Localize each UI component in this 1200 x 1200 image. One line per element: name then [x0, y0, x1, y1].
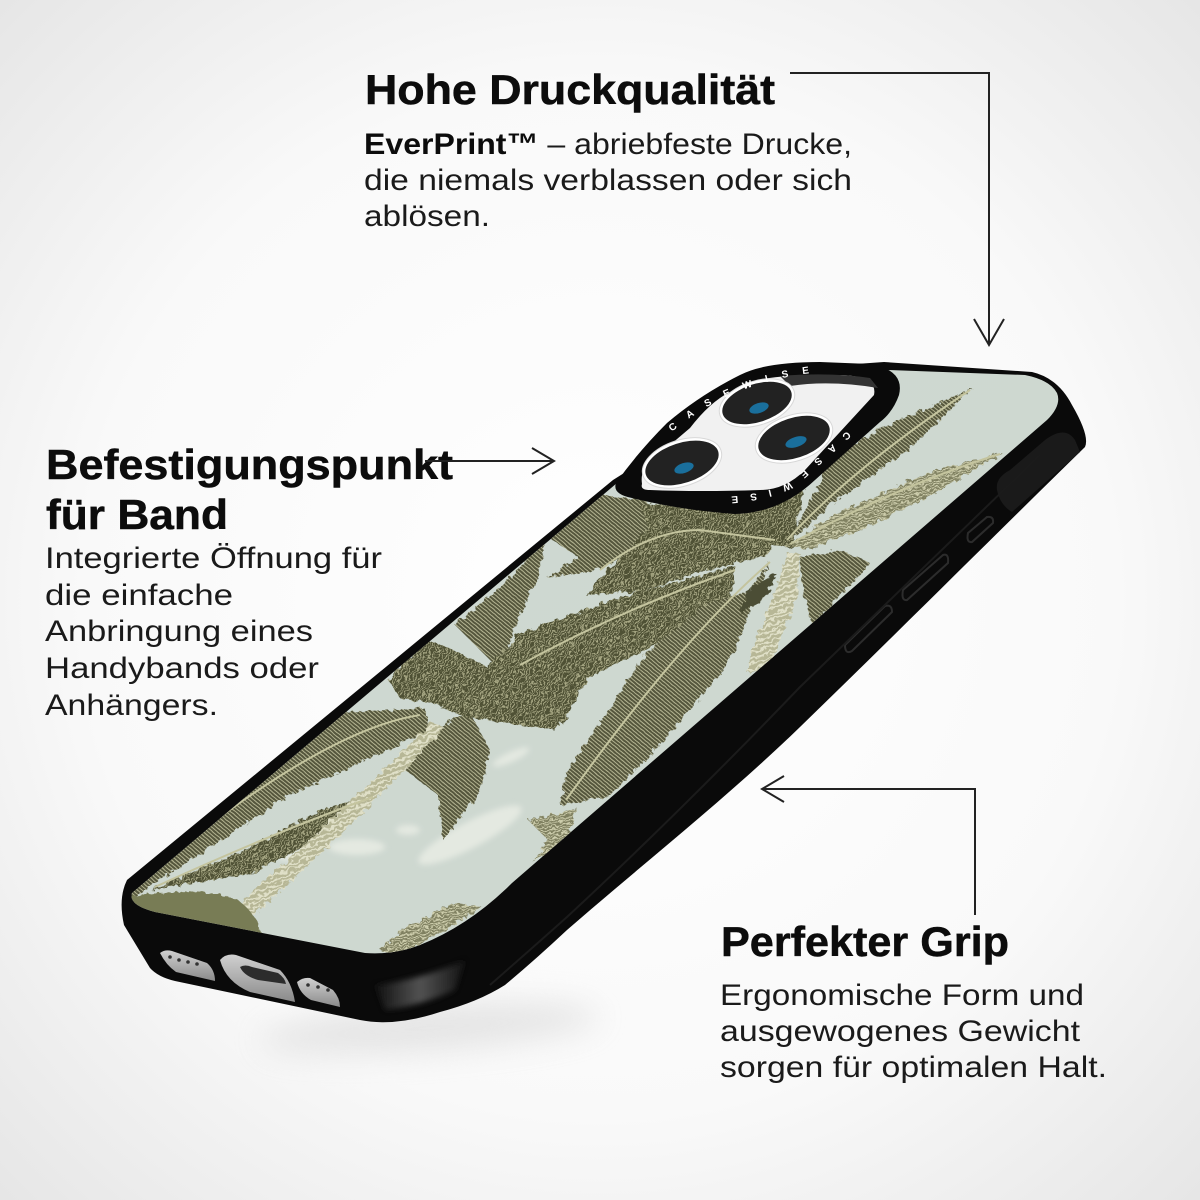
callout: print quality — [364, 66, 852, 233]
camera ring — [615, 362, 900, 514]
frond: dark mini — [740, 573, 777, 613]
frond: lower long — [560, 562, 770, 805]
frond: upper band — [585, 522, 780, 595]
text: strap attachment: Handybands oder — [45, 652, 319, 685]
case body — [122, 362, 1086, 1022]
text: grip — [720, 979, 1107, 1084]
right palm — [515, 388, 1004, 805]
text: grip: ausgewogenes Gewicht — [720, 1015, 1081, 1048]
arrow: print quality — [790, 73, 1004, 345]
left palm — [130, 540, 625, 938]
heading: print quality: Hohe Druckqualität — [365, 66, 775, 113]
text: strap attachment: Integrierte Öffnung für — [45, 542, 382, 575]
left palm crown cluster — [388, 640, 490, 708]
ring lettering: CASEWISE — [669, 366, 809, 430]
right speaker — [297, 978, 340, 1007]
left palm lower frond — [151, 801, 350, 892]
left palm right band — [440, 642, 589, 731]
right corner side panel — [997, 432, 1080, 512]
side buttons — [845, 517, 993, 652]
phone shadow — [259, 994, 601, 1062]
ring lettering: CASEWISE — [732, 432, 850, 504]
bottom palm tuft — [380, 903, 482, 955]
bottom ports — [160, 950, 340, 1007]
bottom-left shrub — [130, 892, 263, 938]
callout: strap attachment — [45, 441, 453, 722]
frond: upper right — [787, 388, 973, 545]
sky — [132, 370, 1058, 954]
text: print quality: EverPrint™ – abriebfeste Drucke, — [364, 128, 852, 161]
side groove — [490, 455, 1040, 985]
window top shade — [780, 374, 878, 388]
frond: centre — [515, 566, 736, 724]
frond: lower right — [800, 550, 870, 628]
camera module — [615, 362, 900, 514]
heading: strap attachment: Befestigungspunkt — [46, 441, 453, 488]
arrow: strap attachment — [425, 448, 554, 474]
ring lettering — [669, 366, 850, 504]
heading: grip: Perfekter Grip — [721, 918, 1009, 965]
text: strap attachment: Anhängers. — [45, 689, 218, 722]
arrow: grip — [762, 776, 975, 915]
heading: strap attachment — [46, 441, 453, 538]
corner highlight — [375, 960, 465, 1010]
heading: strap attachment: für Band — [46, 491, 228, 538]
text: print quality — [364, 128, 852, 233]
phone case — [122, 362, 1086, 1022]
frond: right — [790, 452, 1004, 550]
frond ribs — [140, 390, 1000, 887]
left palm drooping frond — [405, 712, 490, 840]
text: strap attachment — [45, 542, 382, 722]
frond: thin — [547, 545, 640, 578]
right palm trunk — [747, 553, 800, 673]
callout: grip — [720, 918, 1107, 1084]
text: print quality: die niemals verblassen oder sich — [364, 164, 852, 197]
small tuft — [528, 808, 577, 862]
lenses — [636, 370, 839, 498]
text: grip: Ergonomische Form und — [720, 979, 1084, 1012]
clouds — [280, 747, 528, 866]
text: print quality: ablösen. — [364, 200, 490, 233]
left speaker — [160, 950, 215, 981]
left palm top frond — [455, 540, 545, 662]
text: strap attachment: Anbringung eines — [45, 615, 313, 648]
camera window — [642, 375, 874, 491]
left palm big frond — [130, 708, 430, 900]
USB port — [220, 955, 295, 1002]
frond: crown to camera — [640, 485, 805, 548]
frond: top-left droop — [550, 495, 660, 565]
text: strap attachment: die einfache — [45, 579, 233, 612]
left palm trunk — [242, 722, 444, 915]
printed palm artwork — [132, 370, 1058, 954]
text: grip: sorgen für optimalen Halt. — [720, 1051, 1107, 1084]
